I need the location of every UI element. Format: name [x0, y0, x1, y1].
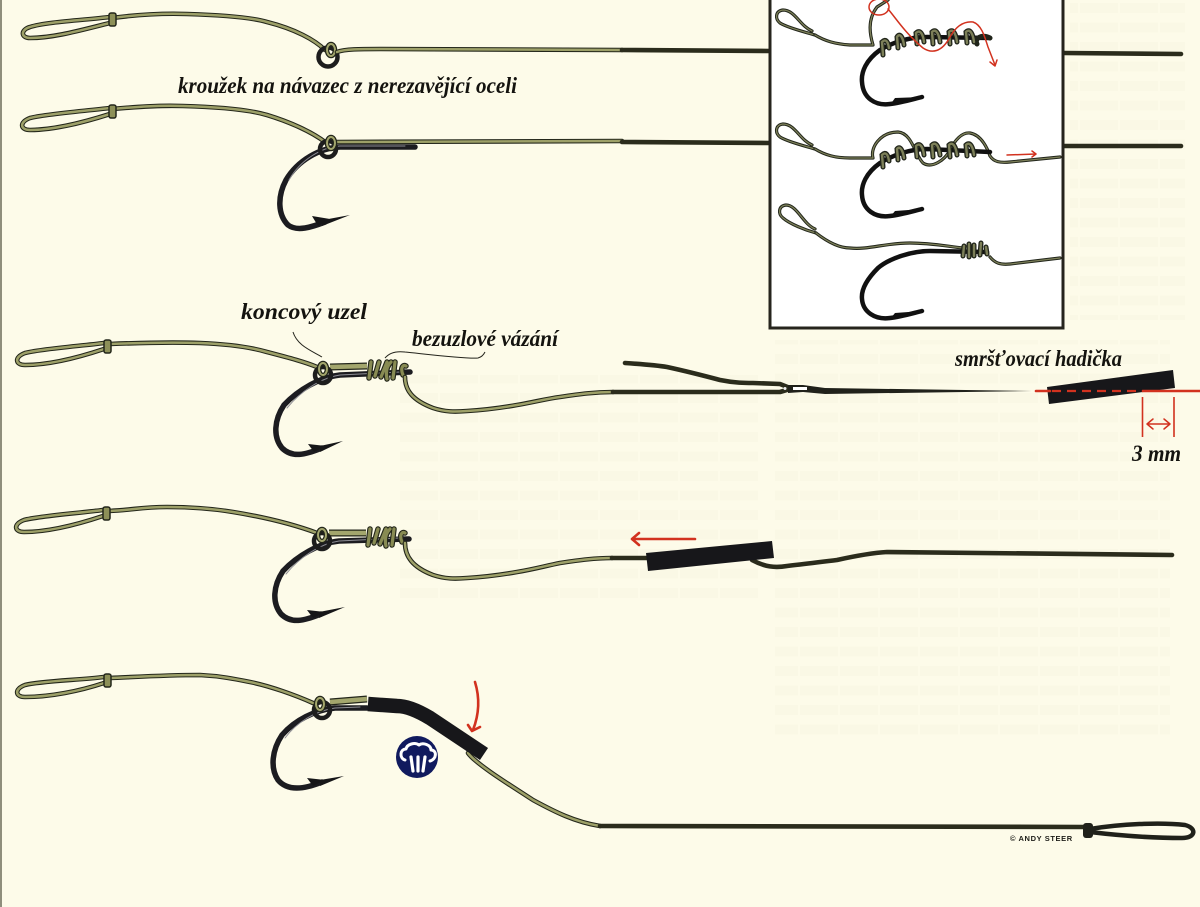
label: ring: kroužek na návazec z nerezavějící oceli: [178, 73, 518, 98]
inset step 1: wrapping the line: [777, 0, 997, 105]
label: knotless binding: [385, 326, 559, 358]
inset step 3: finished knot: [780, 205, 1060, 319]
label: shrink tube: smršťovací hadička: [954, 346, 1122, 371]
shrink tube with measurement: 3 mm: [1131, 441, 1181, 466]
credit: © ANDY STEER: [1010, 834, 1073, 843]
rig 1: leader with ring: [23, 13, 1181, 66]
inset step 2: tightening: [777, 124, 1060, 217]
label: knotless binding: bezuzlové vázání: [412, 326, 559, 351]
rig 2: leader with ring and hook: [22, 105, 1181, 228]
rig 3: leader with hook and needle: [17, 340, 1032, 454]
inset panel: knot steps: [770, 0, 1063, 328]
rig 4: tube threaded on line: [16, 507, 1172, 620]
shrink tube with measurement: [1036, 370, 1200, 466]
icon: heat steam: [396, 736, 438, 778]
label: end knot: koncový uzel: [241, 299, 368, 324]
rig 5: shrunk tube, finished rig: [17, 674, 1193, 838]
label: end knot: [241, 299, 368, 357]
